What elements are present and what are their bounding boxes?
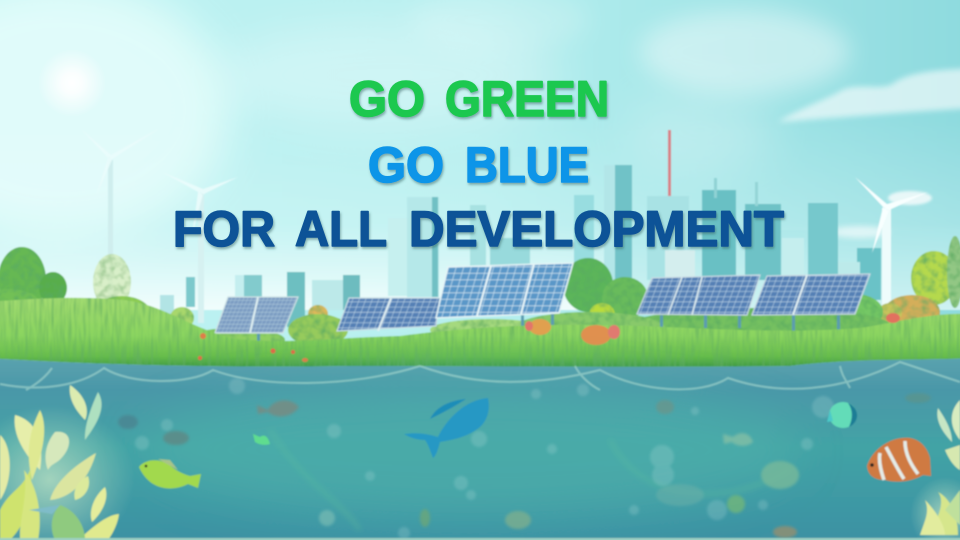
- icon: dim background fish: [118, 393, 931, 538]
- icon: teal tang fish: [827, 402, 857, 428]
- wind turbine right: [855, 177, 928, 306]
- solar panel 2: [337, 298, 440, 331]
- water surface ripples: [0, 362, 960, 390]
- bottom edge strip: [0, 538, 960, 540]
- title line: go green: GREEN: [445, 71, 609, 127]
- grass bank: [0, 298, 960, 367]
- title line: for all development: DEVELOPMENT: [409, 201, 784, 257]
- solar panel 5: [752, 274, 870, 333]
- solar panel 1: [215, 297, 298, 347]
- clouds: [220, 0, 960, 238]
- wind turbine left: [82, 128, 160, 305]
- title: [173, 71, 784, 257]
- title line: go green: [349, 71, 609, 127]
- wind turbine middle: [162, 172, 238, 323]
- icon: small green fish: [253, 434, 270, 445]
- bubbles: [135, 378, 834, 539]
- title line: go green: GO: [349, 71, 425, 127]
- trees and bushes: [0, 236, 960, 352]
- title line: for all development: FOR: [173, 201, 275, 257]
- water: [0, 358, 960, 540]
- sun: [38, 49, 106, 117]
- city skyline: [160, 130, 881, 327]
- flowers: [198, 313, 900, 362]
- title line: go blue: GO: [368, 137, 444, 193]
- seaweed left: [0, 385, 135, 540]
- icon: blue shark fish: [404, 398, 489, 458]
- title line: for all development: [173, 201, 784, 257]
- title line: go blue: [368, 137, 589, 193]
- title line: go blue: BLUE: [465, 137, 589, 193]
- sky background: [0, 0, 960, 370]
- icon: clownfish: [867, 438, 931, 482]
- icon: lime green fish: [139, 459, 201, 488]
- seaweed right: [910, 400, 960, 540]
- title line: for all development: ALL: [295, 201, 387, 257]
- solar panel 4: [637, 275, 760, 336]
- solar panel 3: [436, 263, 573, 335]
